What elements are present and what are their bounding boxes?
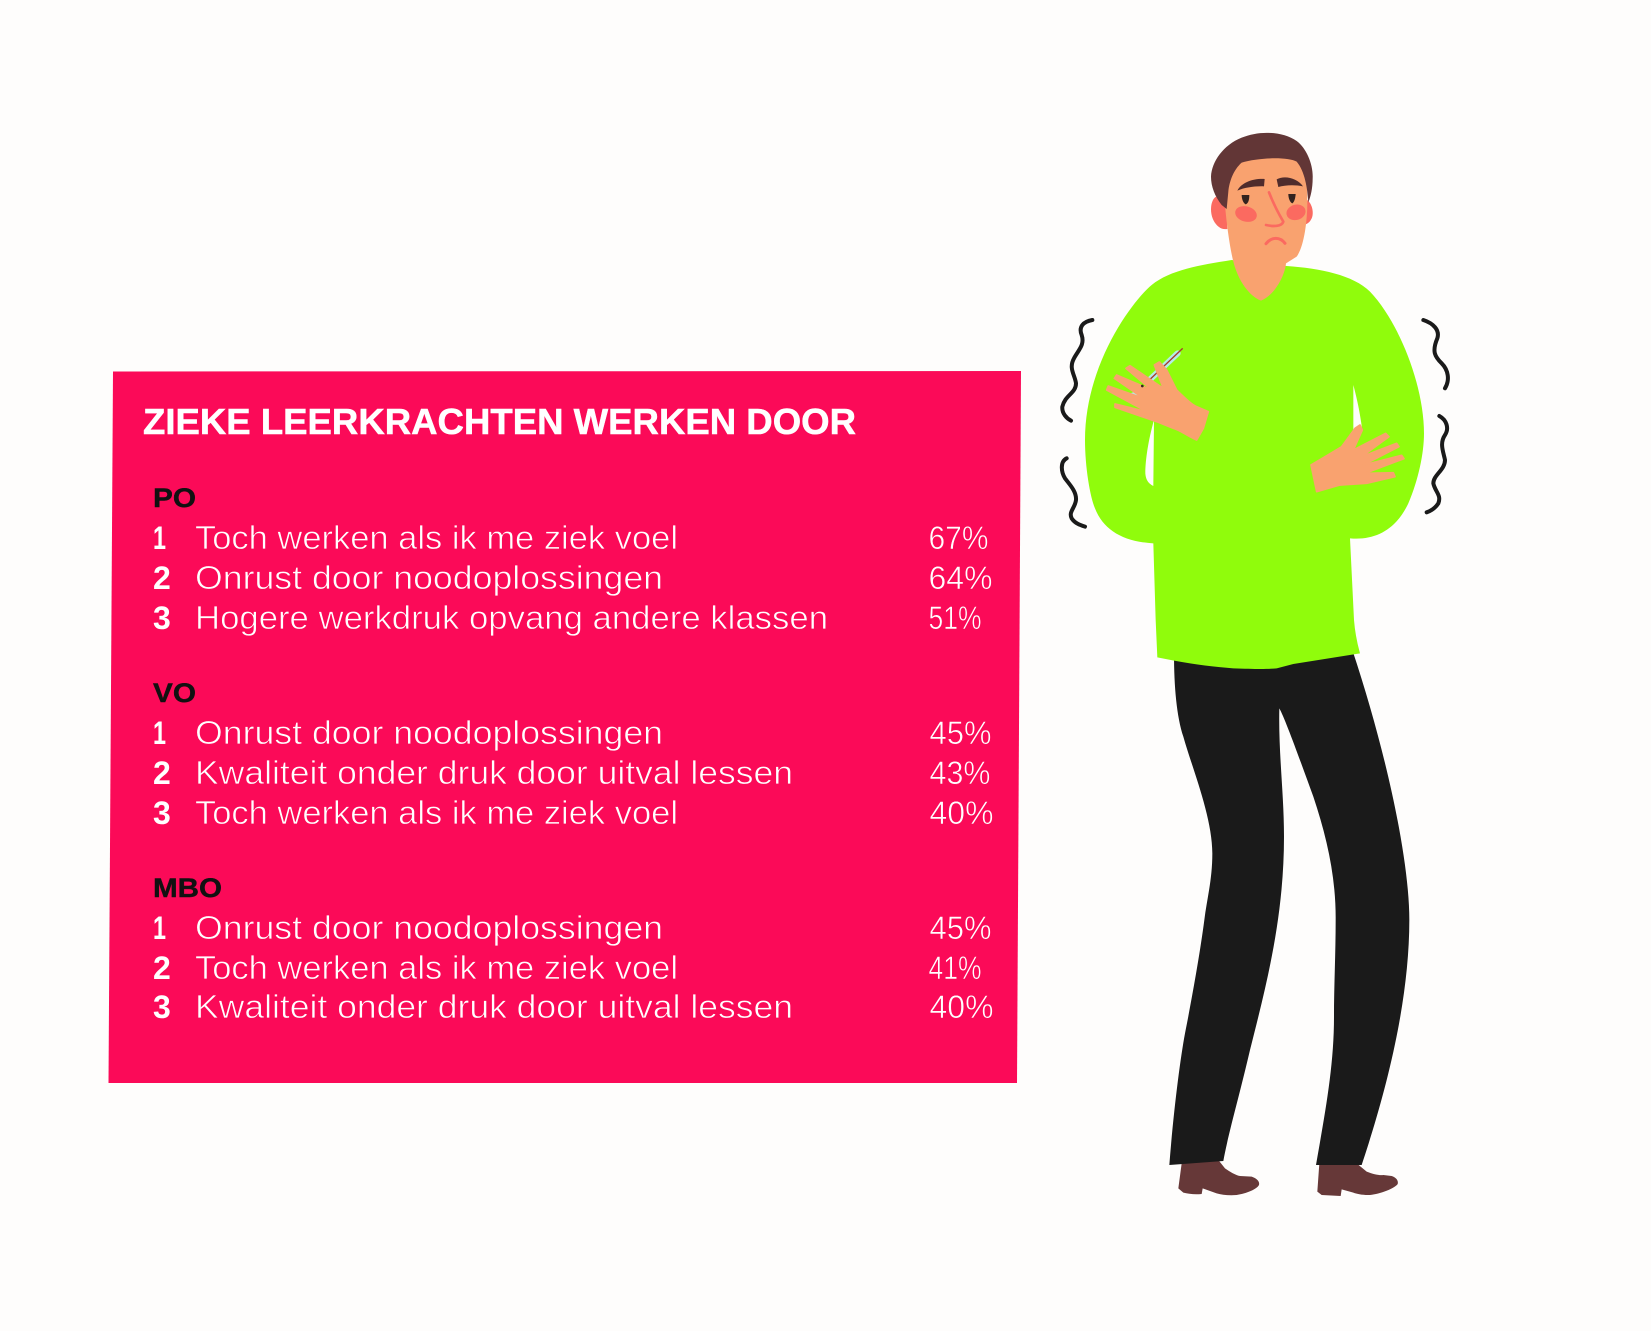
section: MBO: Kwaliteit onder druk door uitval lessen	[195, 988, 793, 1025]
section: MBO: MBO	[153, 873, 222, 903]
section: MBO: Toch werken als ik me ziek voel	[195, 949, 678, 986]
icon: thermometer	[1130, 348, 1183, 396]
trousers and shoes	[1169, 650, 1409, 1196]
section: MBO: 2	[153, 950, 171, 986]
section: VO: Toch werken als ik me ziek voel	[195, 794, 678, 831]
section: MBO: 1	[153, 910, 166, 946]
section: PO: 3	[153, 600, 171, 636]
section: PO: Toch werken als ik me ziek voel	[195, 519, 678, 556]
section: VO: 45%	[930, 715, 992, 751]
section: PO: Hogere werkdruk opvang andere klassen	[195, 599, 828, 636]
title: ZIEKE LEERKRACHTEN WERKEN DOOR	[143, 401, 856, 442]
section: PO: 51%	[928, 600, 982, 636]
section: PO: 1	[153, 520, 166, 556]
section: MBO: 41%	[928, 950, 982, 986]
section: VO: VO	[153, 678, 196, 708]
section: PO: 2	[153, 560, 171, 596]
section: MBO: 40%	[930, 989, 994, 1025]
illustration: sick shivering man	[1062, 133, 1448, 1196]
section: VO: Kwaliteit onder druk door uitval lessen	[195, 754, 793, 791]
section: MBO: 3	[153, 989, 171, 1025]
section: VO: 2	[153, 755, 171, 791]
section: VO: Onrust door noodoplossingen	[195, 714, 663, 751]
section: PO: 64%	[928, 560, 992, 596]
section: PO	[153, 483, 992, 636]
section: MBO	[153, 873, 994, 1025]
shiver lines	[1062, 320, 1448, 527]
section: PO: PO	[153, 483, 196, 513]
panel: sick teachers keep working	[108, 371, 1021, 1083]
section: VO	[153, 678, 994, 831]
section: VO: 1	[153, 715, 166, 751]
section: VO: 40%	[930, 795, 994, 831]
right hand	[1311, 425, 1404, 492]
section: VO: 43%	[930, 755, 990, 791]
shirt	[1085, 260, 1424, 669]
section: PO: Onrust door noodoplossingen	[195, 559, 663, 596]
section: MBO: 45%	[930, 910, 992, 946]
section: MBO: Onrust door noodoplossingen	[195, 909, 663, 946]
section: VO: 3	[153, 795, 171, 831]
left hand	[1107, 362, 1208, 440]
head	[1211, 133, 1313, 301]
section: PO: 67%	[928, 520, 988, 556]
